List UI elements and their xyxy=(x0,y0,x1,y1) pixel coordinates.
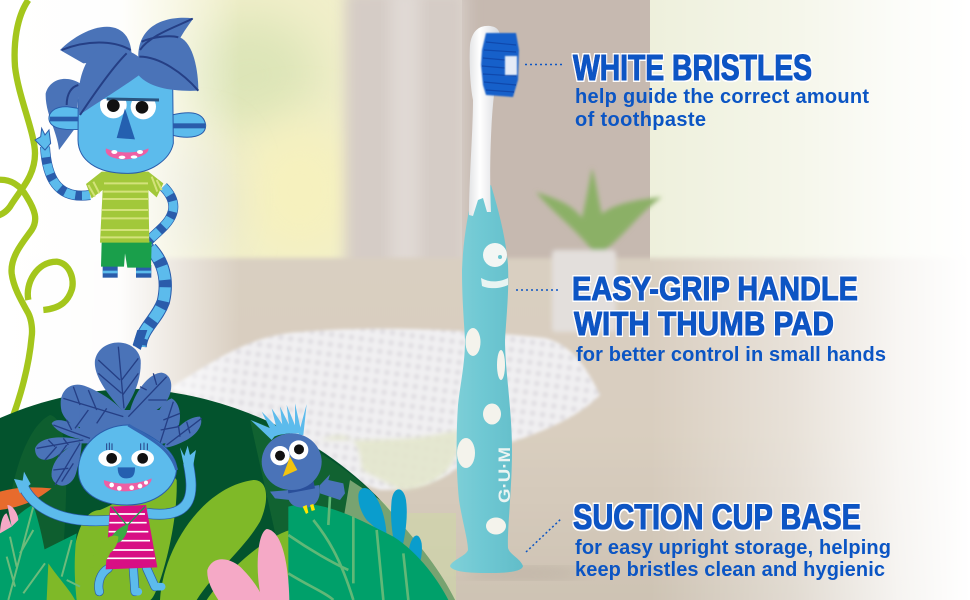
girl legs xyxy=(99,568,162,592)
bird xyxy=(251,403,345,514)
girl head xyxy=(78,425,177,505)
leader line: suction base xyxy=(526,518,562,552)
green vine xyxy=(0,0,73,450)
callout: white bristles: of toothpaste xyxy=(575,109,706,131)
callout: suction cup base xyxy=(573,497,891,581)
bristles xyxy=(481,33,519,97)
girl dress xyxy=(106,505,157,569)
girl tail behind hair xyxy=(133,330,147,401)
boy shirt xyxy=(86,172,163,243)
orange flower xyxy=(0,487,52,510)
jungle hill xyxy=(0,389,455,600)
boy character xyxy=(35,18,206,347)
brush neck and head xyxy=(469,26,500,216)
callout: easy-grip handle: WITH THUMB PAD xyxy=(574,305,834,342)
brush handle xyxy=(450,185,523,573)
boy back hair xyxy=(46,79,80,150)
callout: suction cup base: for easy upright storage, helping xyxy=(575,537,891,559)
callout: suction cup base: keep bristles clean and hygienic xyxy=(575,559,885,581)
towel xyxy=(170,329,600,490)
girl arms xyxy=(23,487,113,521)
pink petals xyxy=(0,513,12,533)
callout: easy-grip handle xyxy=(572,270,886,366)
boy arms xyxy=(45,147,90,196)
boy hair xyxy=(60,27,132,63)
girl face xyxy=(98,450,122,467)
leader line: bristles xyxy=(525,64,563,66)
boy shorts and socks xyxy=(103,265,118,278)
left teal leaves xyxy=(0,505,50,600)
leaf bag xyxy=(112,507,145,538)
boy ears xyxy=(49,107,78,130)
big teal leaf xyxy=(288,504,448,600)
bird head xyxy=(262,433,322,490)
translucent leaf shape over table xyxy=(330,480,456,600)
leader line: handle xyxy=(516,289,560,291)
callout: easy-grip handle: EASY-GRIP HANDLE xyxy=(572,270,858,307)
callout: white bristles: WHITE BRISTLES xyxy=(573,47,812,88)
callout: suction cup base: SUCTION CUP BASE xyxy=(573,497,861,537)
large lime leaves xyxy=(71,475,177,600)
white bristle stripe xyxy=(505,56,517,75)
boy face xyxy=(100,92,127,118)
callout: white bristles xyxy=(573,47,869,131)
handle monster face xyxy=(483,243,507,267)
callout: easy-grip handle: for better control in small hands xyxy=(576,344,886,366)
girl character and foreground leaves xyxy=(0,330,448,600)
bird crest xyxy=(251,403,307,440)
GUM logo: G·U·M xyxy=(495,447,514,503)
boy tail xyxy=(140,248,165,347)
blue plants xyxy=(358,488,422,567)
girl hair leaves xyxy=(35,342,201,486)
boy head xyxy=(78,73,173,173)
toothbrush xyxy=(450,26,585,578)
white spots xyxy=(457,328,506,534)
bird wings and body xyxy=(320,474,345,500)
callout: white bristles: help guide the correct amount xyxy=(575,86,869,108)
pink leaves xyxy=(207,559,263,600)
base shadow xyxy=(465,568,585,578)
plant in pot xyxy=(536,168,662,332)
